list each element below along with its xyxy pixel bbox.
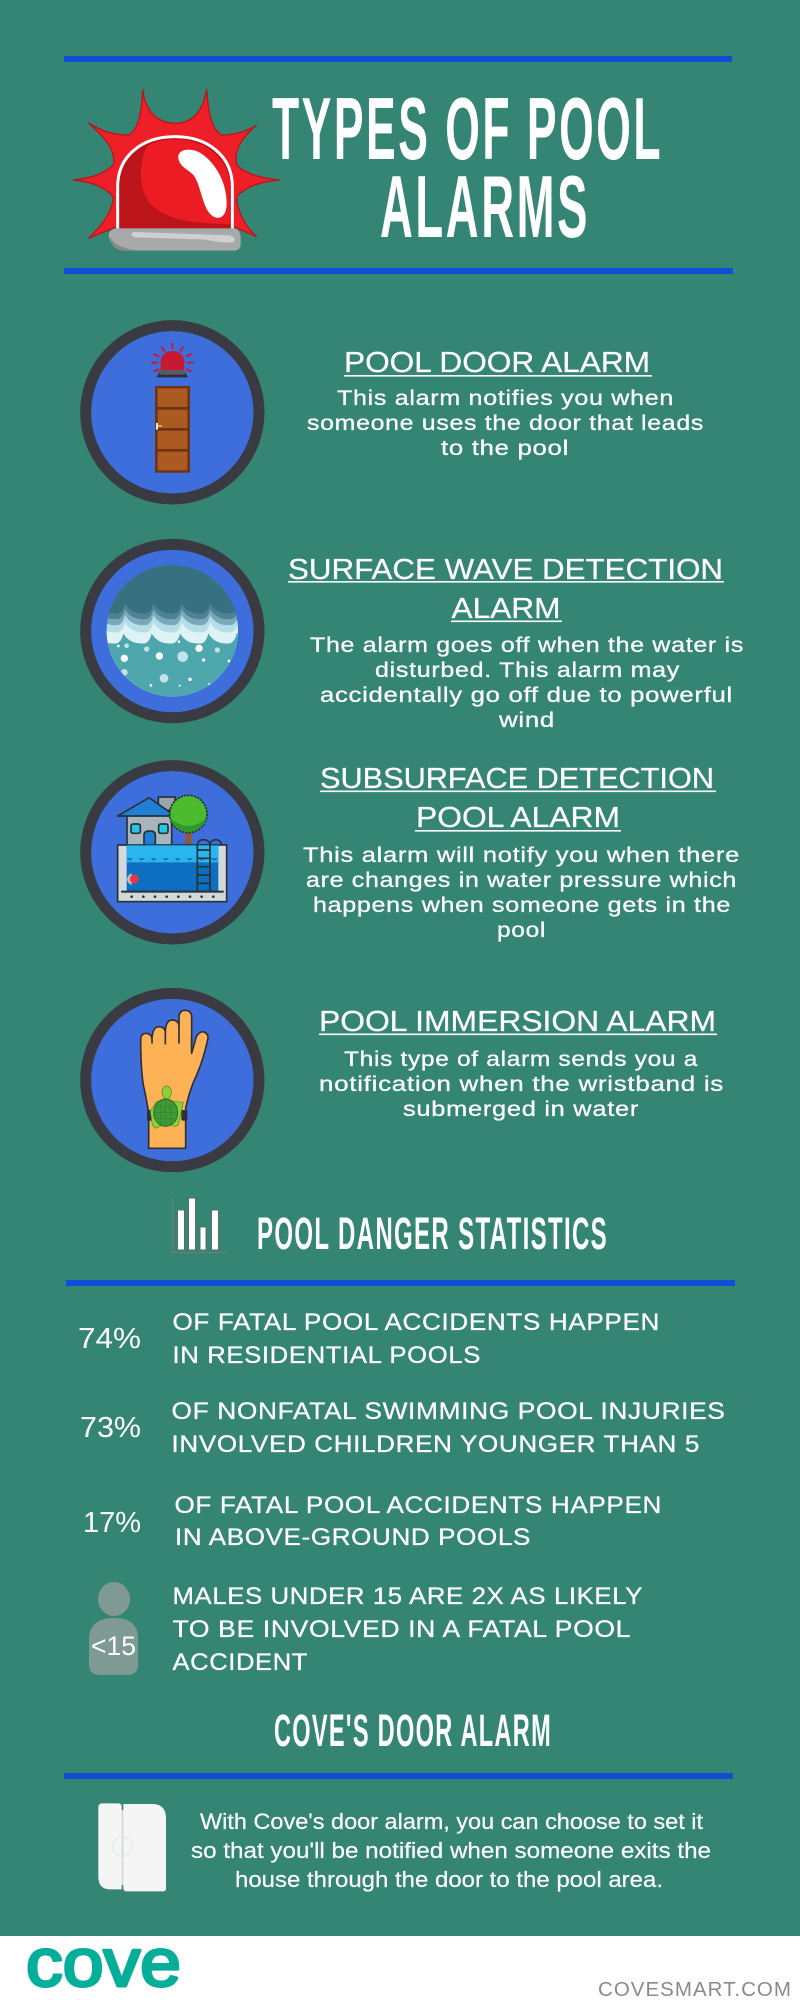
title: ALARMS	[380, 157, 590, 256]
panel: pool door alarm	[86, 326, 704, 499]
description: to the pool	[441, 436, 569, 460]
cove description	[191, 1809, 711, 1892]
heading: POOL ALARM	[416, 802, 620, 834]
description	[310, 633, 744, 732]
stat: 73%: 73%	[80, 1412, 141, 1444]
heading: cove's door alarm: COVE'S DOOR ALARM	[274, 1705, 552, 1756]
heading: ALARM	[452, 593, 560, 625]
heading: SUBSURFACE DETECTION	[320, 763, 714, 795]
icon: door sensor	[98, 1803, 166, 1891]
description	[319, 1047, 724, 1121]
description: are changes in water pressure which	[306, 868, 737, 892]
icon: child figure	[89, 1582, 138, 1675]
top rule	[64, 56, 732, 62]
description: happens when someone gets in the	[313, 893, 731, 917]
icon: house and pool	[86, 766, 259, 939]
statistic text: TO BE INVOLVED IN A FATAL POOL	[172, 1616, 631, 1643]
stat: 74%: OF FATAL POOL ACCIDENTS HAPPEN	[172, 1309, 660, 1336]
heading: POOL DOOR ALARM	[344, 347, 650, 379]
description	[307, 386, 704, 460]
icon: child figure: <15	[91, 1631, 136, 1661]
heading: SURFACE WAVE DETECTION	[288, 554, 723, 586]
title	[272, 79, 663, 256]
description: This alarm will notify you when there	[303, 843, 740, 867]
panel: surface wave detection alarm	[86, 544, 744, 733]
stat: 73%: OF NONFATAL SWIMMING POOL INJURIES	[172, 1398, 726, 1425]
panel: pool immersion alarm	[86, 993, 724, 1167]
stat: males under 15	[89, 1582, 643, 1676]
stat: 17%	[83, 1492, 662, 1551]
stat: 74%: IN RESIDENTIAL POOLS	[172, 1342, 481, 1369]
description: The alarm goes off when the water is	[310, 633, 744, 657]
stat: 73%	[80, 1398, 726, 1458]
description: disturbed. This alarm may	[375, 658, 680, 682]
heading: POOL IMMERSION ALARM	[319, 1006, 716, 1038]
statistic text: ACCIDENT	[172, 1649, 308, 1676]
cove description: so that you'll be notified when someone exits the	[191, 1838, 711, 1863]
stat: 17%: OF FATAL POOL ACCIDENTS HAPPEN	[174, 1492, 662, 1519]
description: notification when the wristband is	[319, 1072, 724, 1096]
cove description: house through the door to the pool area.	[235, 1867, 663, 1892]
stat: 17%: 17%	[83, 1507, 141, 1539]
icon: bar chart	[172, 1197, 227, 1252]
description: someone uses the door that leads	[307, 411, 704, 435]
header bottom rule	[64, 268, 733, 274]
description: This type of alarm sends you a	[344, 1047, 698, 1071]
cove section rule	[64, 1773, 733, 1779]
panel: subsurface detection pool alarm	[86, 763, 740, 942]
icon: red siren alarm	[73, 89, 280, 251]
description: submerged in water	[403, 1097, 639, 1121]
statistics rule	[66, 1280, 735, 1286]
stat: 74%: 74%	[78, 1323, 141, 1355]
heading	[320, 763, 716, 834]
icon: hand with turtle wristband	[86, 993, 259, 1167]
description: This alarm notifies you when	[337, 386, 674, 410]
icon: waves	[86, 544, 259, 733]
icon: door with alarm	[86, 326, 259, 499]
stat: 17%: IN ABOVE-GROUND POOLS	[175, 1524, 531, 1551]
stat: 73%: INVOLVED CHILDREN YOUNGER THAN 5	[172, 1431, 700, 1458]
cove description: With Cove's door alarm, you can choose to set it	[200, 1809, 703, 1834]
description: accidentally go off due to powerful	[320, 683, 733, 707]
statistic text	[172, 1583, 643, 1676]
stat: 74%	[78, 1309, 660, 1369]
footer	[0, 1925, 800, 2000]
description: wind	[498, 708, 555, 732]
description	[303, 843, 740, 942]
statistic text: MALES UNDER 15 ARE 2X AS LIKELY	[172, 1583, 643, 1610]
logo: cove: cove	[26, 1925, 181, 2000]
heading	[288, 554, 724, 625]
description: pool	[497, 918, 546, 942]
